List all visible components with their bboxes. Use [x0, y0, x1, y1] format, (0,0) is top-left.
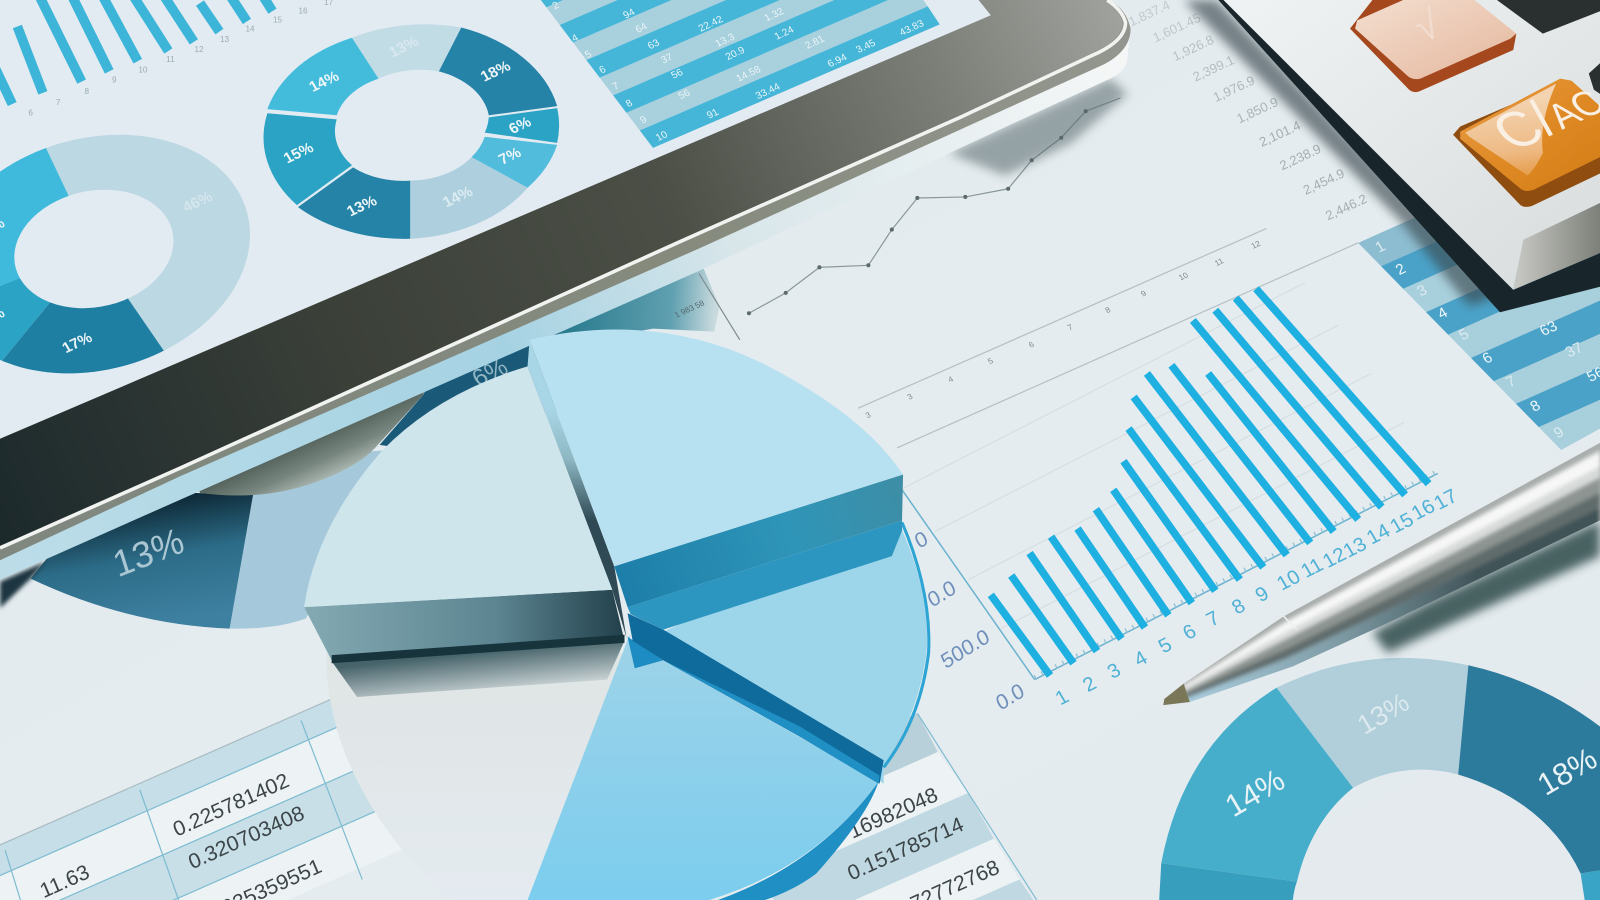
tablet data table: 8 [624, 98, 635, 110]
number column [1126, 0, 1369, 223]
line chart axis labels: 3 [906, 392, 915, 402]
left pale wedge [304, 366, 624, 663]
number column: 2,399.1 [1191, 52, 1236, 84]
shadow on base [332, 641, 624, 697]
donut label 6%: 6% [467, 354, 513, 392]
y axis labels: 0.0 [992, 679, 1028, 715]
table values: 0.151785714 [844, 813, 967, 885]
tablet left shadow [0, 561, 46, 608]
tablet data table: 56 [669, 67, 686, 81]
bars [991, 289, 1429, 676]
pen [1163, 443, 1600, 706]
tablet data table: 14.58 [734, 64, 763, 84]
table values: 0.225781402 [170, 769, 293, 841]
x axis labels: 2 [1079, 673, 1100, 697]
number column: 2,454.9 [1301, 166, 1347, 198]
line chart axis labels: 11 [1213, 256, 1226, 268]
number column: 1,976.9 [1211, 73, 1257, 105]
tablet data table: 4 [570, 33, 581, 45]
line chart axis labels: 10 [1177, 270, 1190, 282]
gap between wedges [528, 340, 627, 638]
donut hole under tablet [180, 357, 439, 496]
y axis labels: 0 [911, 527, 932, 553]
number column: 2,238.9 [1277, 141, 1323, 173]
x axis labels: 1 [1052, 686, 1073, 710]
x axis labels: 14 [1363, 520, 1394, 549]
right data table [1358, 203, 1600, 450]
line chart axis labels: 6 [1027, 340, 1036, 350]
tablet data table: 5 [583, 49, 594, 61]
donut labels [1219, 686, 1600, 824]
calculator dark base [1218, 0, 1600, 312]
tablet donut right: 14% [306, 68, 343, 96]
tablet data table: 37 [659, 52, 675, 66]
x axis labels: 3 [1104, 659, 1125, 683]
tablet data table: 64 [634, 21, 650, 36]
calculator [1184, 0, 1600, 312]
tablet donut left: 17% [59, 329, 96, 357]
tablet data table: 1.32 [763, 6, 786, 24]
y axis labels [911, 527, 1028, 715]
tablet donut right: 7% [496, 144, 525, 168]
x axis labels [1052, 485, 1462, 710]
tablet [0, 0, 1131, 580]
tablet data table: 6 [597, 64, 609, 76]
tablet data table: 7 [611, 81, 622, 93]
tablet data table: 56 [677, 88, 693, 102]
table values: 16982048 [846, 783, 941, 843]
tablet bar labels: 8 [84, 87, 89, 96]
square root symbol: √ [1406, 0, 1447, 51]
right data table: 37 [1562, 339, 1586, 361]
tablet donut right: 13% [344, 192, 381, 220]
tablet data table: 20.9 [724, 45, 748, 63]
tablet data table: 1.24 [773, 25, 797, 42]
tablet data table: 22.42 [697, 14, 726, 34]
x axis labels: 5 [1155, 634, 1176, 658]
x axis labels: 11 [1297, 554, 1327, 583]
y axis labels: 500.0 [937, 625, 993, 674]
key: clear all [1453, 70, 1600, 207]
x axis labels: 16 [1408, 496, 1439, 525]
y axis labels: 0.0 [924, 576, 960, 612]
left large donut on paper [31, 306, 571, 629]
tablet silver rim [0, 0, 1126, 548]
line chart [673, 98, 1266, 408]
tablet bar chart [0, 0, 272, 104]
tablet data table: 63 [646, 38, 662, 52]
x axis labels: 15 [1386, 509, 1418, 538]
tablet data table: 94 [621, 7, 638, 21]
key: square root [1350, 0, 1516, 92]
right data table: 7 [1503, 373, 1519, 391]
tablet data table: 2 [551, 0, 562, 12]
tablet bar labels: 16 [299, 6, 308, 15]
right data table: 1 [1372, 238, 1389, 256]
tablet data table: 9 [638, 114, 649, 126]
x axis labels: 6 [1179, 621, 1200, 645]
upper blue wedge [530, 330, 903, 607]
x axis labels: 7 [1203, 607, 1224, 631]
tablet bar labels: 13 [220, 35, 229, 44]
tablet data table: 6.94 [826, 52, 850, 70]
pen tip [1163, 684, 1190, 705]
tablet donut right: 18% [478, 58, 514, 85]
donut dark ring [380, 306, 571, 449]
number column: 1,601.45 [1150, 10, 1203, 45]
line chart axis labels: 5 [986, 356, 995, 366]
tablet olive edge band [0, 0, 1131, 560]
tablet donut left: 46% [180, 188, 216, 216]
tablet data table: 10 [654, 129, 670, 144]
tablet side edge [0, 0, 1131, 580]
key glare [1465, 84, 1556, 176]
calculator body [1223, 0, 1600, 290]
table values [844, 783, 1003, 900]
right data table: 8 [1527, 397, 1544, 415]
right data table: 2 [1393, 261, 1409, 279]
table values: 0.320703408 [185, 802, 308, 874]
white base disc [326, 653, 633, 900]
x axis labels: 8 [1228, 595, 1249, 619]
tablet data table [541, 0, 940, 148]
table values [37, 769, 325, 900]
tablet bar labels: 11 [166, 55, 175, 64]
tablet donut right [263, 24, 559, 239]
tablet bar labels: 9 [112, 76, 117, 85]
tablet donut left [0, 134, 250, 374]
tablet data table: 91 [705, 107, 721, 121]
tablet data table: 2.81 [803, 34, 827, 52]
line chart axis labels: 7 [1066, 322, 1075, 332]
calculator front face [1513, 203, 1600, 290]
line chart axis labels: 3 [864, 410, 873, 420]
tablet donut right: 6% [506, 114, 535, 138]
pen body [1184, 443, 1600, 702]
tablet bar labels: 12 [194, 45, 204, 54]
bottom right donut chart [1159, 658, 1600, 900]
line chart axis labels: 12 [1250, 239, 1263, 251]
tablet donut right: 15% [281, 139, 317, 167]
tablet screen [0, 0, 991, 439]
line chart axis labels: 4 [946, 374, 956, 384]
right data table: 5 [1456, 326, 1472, 344]
tablet data table: 13.3 [714, 32, 737, 50]
number column: 2,446.2 [1323, 191, 1369, 223]
number column: 1,926.8 [1170, 32, 1216, 64]
number column: 1,850.9 [1234, 94, 1280, 126]
pen collar [1284, 616, 1297, 630]
bottom right table behind pie [713, 713, 1046, 900]
key: dark [1497, 0, 1600, 34]
x axis labels: 17 [1430, 485, 1462, 514]
tablet bezel [0, 0, 1122, 546]
donut label 13%: 13% [108, 520, 189, 585]
tablet data table: 3.45 [854, 38, 878, 56]
calculator soft shadow [1184, 0, 1500, 306]
donut labels: 13% [1352, 686, 1414, 740]
tablet bar labels [28, 0, 334, 117]
line chart axis labels: 9 [1139, 289, 1148, 299]
right blue wedge [628, 520, 929, 784]
tablet bar labels: 10 [138, 65, 148, 74]
lower blue wedge [528, 635, 879, 900]
tablet data table: 43.83 [898, 18, 927, 39]
right data table: 4 [1435, 304, 1451, 323]
right data table: 63 [1537, 318, 1561, 340]
teal paper shade by tablet [551, 255, 719, 347]
bar chart [897, 243, 1462, 715]
x axis labels: 13 [1339, 533, 1371, 562]
right data table: 3 [1414, 282, 1430, 300]
tablet bar labels: 14 [245, 25, 255, 34]
tablet bar labels: 6 [28, 108, 33, 117]
right data table: 9 [1551, 424, 1567, 442]
x axis labels: 10 [1273, 566, 1304, 595]
tablet shadow [949, 79, 1128, 176]
tablet data table: 33.44 [754, 81, 783, 102]
x axis labels: 9 [1252, 583, 1273, 607]
tablet bar labels: 15 [273, 15, 283, 24]
x axis labels: 12 [1319, 544, 1350, 573]
right data table: 6 [1479, 349, 1496, 367]
key: dark right [1589, 63, 1600, 94]
x axis labels: 4 [1130, 647, 1151, 671]
donut labels: 14% [1219, 762, 1291, 824]
tablet bar labels: 7 [56, 98, 61, 107]
tablet donut right: 14% [440, 183, 476, 211]
line chart axis labels [864, 239, 1263, 420]
bottom left data table [0, 665, 408, 900]
tablet donut right: 13% [386, 33, 422, 61]
number column: 2,101.4 [1257, 118, 1303, 150]
small table code: 1 983 58 [673, 298, 707, 320]
line chart axis labels: 8 [1104, 305, 1113, 315]
pen shadow [1372, 520, 1600, 653]
pie chart [304, 330, 929, 900]
